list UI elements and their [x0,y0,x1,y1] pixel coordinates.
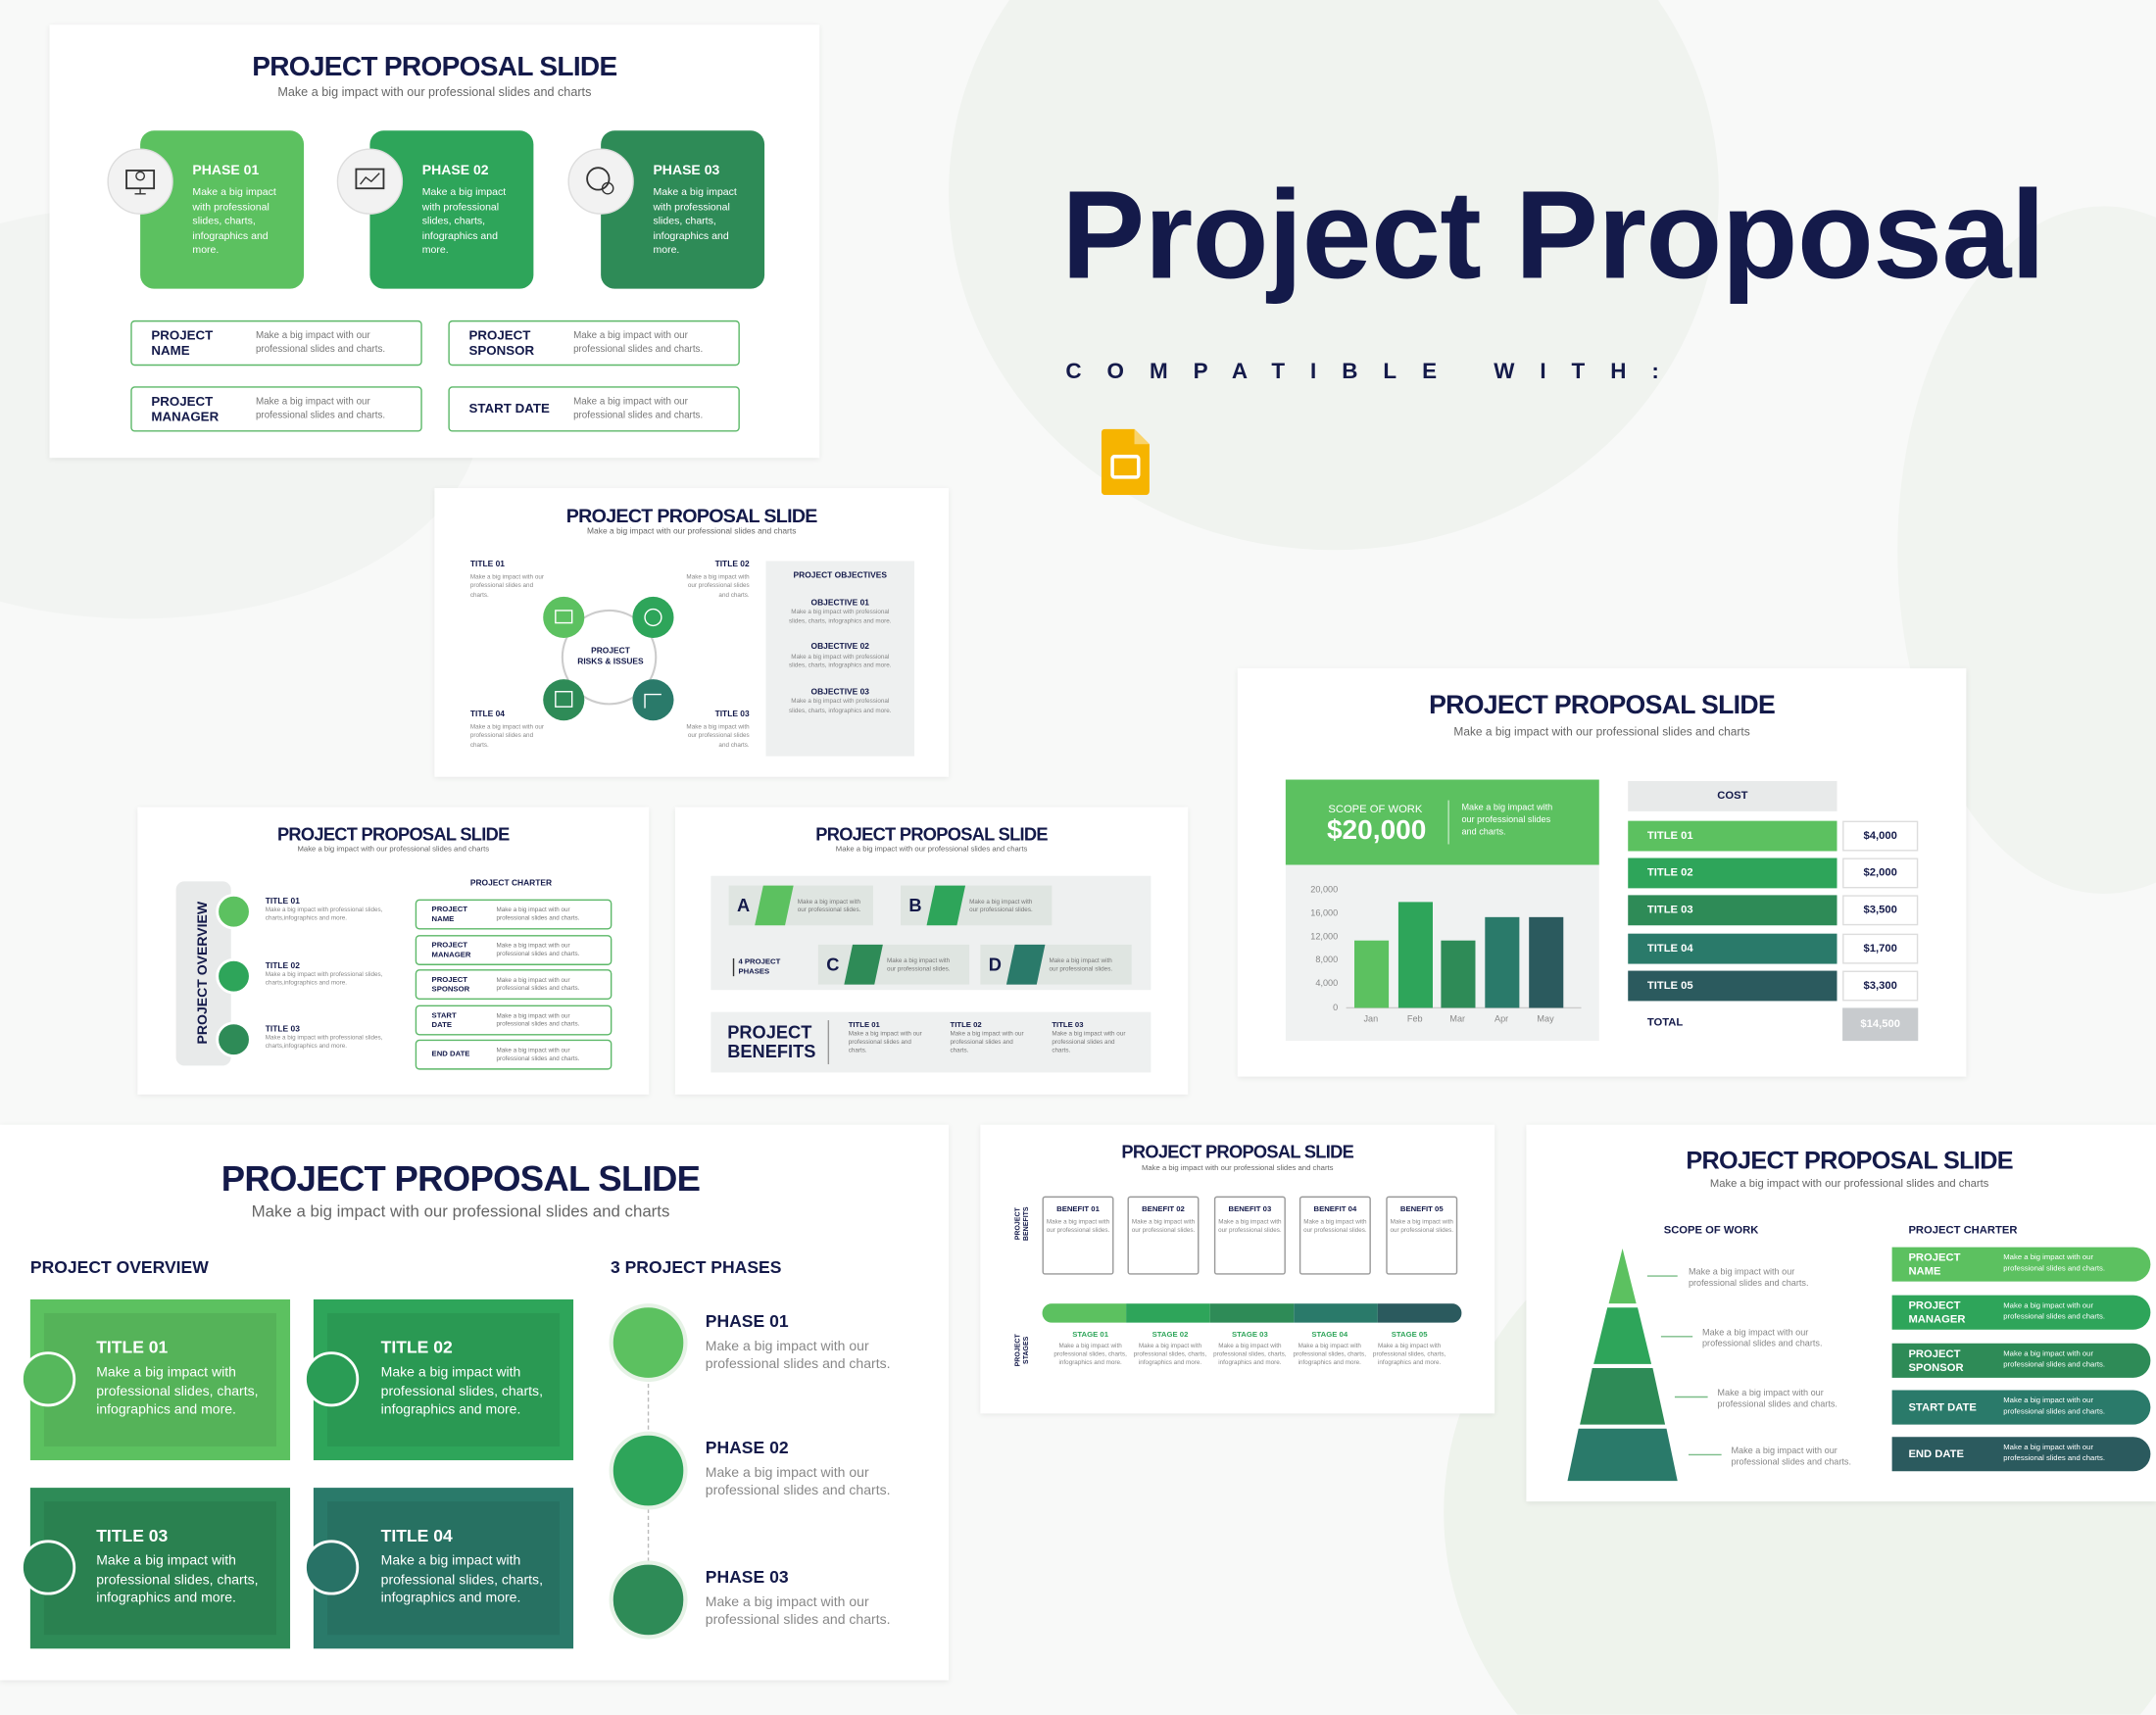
phases list: Make a big impact with our [706,1594,869,1609]
phases panel: C [826,955,839,975]
phase card 3: Make a big impact with professional slides, charts, infographics and more. [653,185,737,256]
slide 2: risks & objectives: TITLE 03 [715,710,750,719]
benefit boxes: BENEFIT 04 [1313,1205,1356,1214]
overview cards: TITLE 01 [96,1338,168,1357]
stages: STAGE 04 [1311,1331,1348,1340]
charter pills: MANAGER [1908,1312,1965,1325]
pyramid: professional slides and charts. [1731,1456,1851,1466]
objectives panel: slides, charts, infographics and more. [789,662,892,668]
overview cards [24,1299,574,1648]
info box: start date [448,386,740,432]
charter boxes: Make a big impact with our [497,942,570,949]
overview items [216,894,382,1056]
stages: Make a big impact with professional slides, charts, infographics and more. [1294,1342,1366,1365]
benefits panel: TITLE 02 [951,1021,982,1030]
bar chart: 16,000 [1310,907,1338,917]
stages: STAGE 02 [1152,1331,1188,1340]
vertical tab [176,881,231,1065]
slide 1: phases [50,24,819,458]
pyramid: Make a big impact with our [1717,1388,1824,1397]
slide 5: phases & benefits [675,808,1188,1095]
charter pills [1891,1224,2150,1472]
info box: sponsor: SPONSOR [468,344,534,359]
phases panel: 4 PROJECT [738,958,780,966]
objectives panel: OBJECTIVE 02 [811,644,869,652]
icon: google slides [1102,429,1150,496]
cost table: TITLE 01 [1647,829,1693,842]
overview items: TITLE 03 [266,1026,300,1034]
slide 6: overview & 3 phases (large) [0,1125,949,1681]
slide 3: scope & cost chart: Make a big impact with our professional slides and charts [1453,724,1750,738]
scope of work box: Make a big impact with [1461,803,1552,812]
overview items: TITLE 01 [266,898,300,906]
overview cards: TITLE 04 [381,1526,453,1545]
phases panel: our professional slides. [887,965,951,972]
bar chart [1286,865,1599,1041]
heading: PROJECT PROPOSAL SLIDE [815,823,1048,844]
charter pills: Make a big impact with our [2003,1397,2093,1405]
phases panel: B [908,895,922,915]
slide 7: benefits & stages: STAGES [1022,1337,1031,1364]
phases panel: A [737,895,750,915]
overview items: Make a big impact with professional slides, charts,infographics and more. [266,971,382,986]
heading: PROJECT PROPOSAL SLIDE [221,1157,700,1199]
scope of work box: and charts. [1461,828,1506,837]
titles: TITLE 01 [470,561,505,569]
phases list: PHASE 03 [706,1567,789,1587]
bar chart: 4,000 [1315,978,1338,988]
info box: sponsor: professional slides and charts. [573,345,703,355]
benefit boxes [1043,1196,1458,1275]
charter pills: PROJECT [1908,1348,1960,1360]
pyramid: professional slides and charts. [1702,1339,1823,1348]
info box: sponsor: PROJECT [468,328,530,344]
bar chart: Mar [1449,1013,1465,1023]
cost table: TITLE 03 [1647,904,1693,915]
charter boxes: SPONSOR [432,985,469,994]
objectives panel [766,561,914,757]
charter pills: END DATE [1908,1447,1964,1460]
phases list: professional slides and charts. [706,1613,891,1628]
bar chart: 0 [1333,1003,1338,1012]
pyramid: professional slides and charts. [1689,1278,1809,1288]
charter pills: Make a big impact with our [2003,1350,2093,1358]
scope of work box [1286,780,1599,865]
slide 1: phases: Make a big impact with our professional slides and charts [277,85,591,99]
charter boxes: START [432,1012,457,1020]
benefit boxes: Make a big impact with our professional slides. [1390,1218,1453,1234]
benefits panel: PROJECT [727,1021,811,1043]
heading: PROJECT PROPOSAL SLIDE [252,52,617,82]
info box: manager: professional slides and charts. [256,412,385,420]
pyramid: SCOPE OF WORK [1664,1224,1758,1236]
overview items: Make a big impact with professional slides, charts,infographics and more. [266,906,382,921]
slide 7: benefits & stages: Make a big impact with our professional slides and charts [1142,1164,1334,1173]
overview items: Make a big impact with professional slides, charts,infographics and more. [266,1034,382,1050]
benefits panel: Make a big impact with our professional slides and charts. [951,1030,1024,1054]
cost table: $1,700 [1864,942,1897,955]
benefit boxes: BENEFIT 01 [1056,1205,1100,1214]
phase card 1: Make a big impact with professional slides, charts, infographics and more. [192,185,276,256]
charter boxes: professional slides and charts. [497,1020,579,1027]
bar chart: 8,000 [1315,955,1338,964]
info box: project name: Make a big impact with our [256,331,370,341]
overview cards: Make a big impact with professional slides, charts, infographics and more. [381,1365,543,1418]
stages [1054,1331,1446,1366]
bar chart: 12,000 [1310,931,1338,941]
info box: project name: NAME [151,344,190,359]
scope of work box: $20,000 [1327,815,1426,846]
cost table: TOTAL [1647,1016,1683,1028]
bar chart: Jan [1364,1013,1378,1023]
phases label: 3 PROJECT PHASES [611,1258,781,1277]
info box: sponsor [448,320,740,366]
phase card 3 [568,130,764,289]
slide 3: scope & cost chart [1238,668,1966,1077]
vertical labels: PROJECT [1014,1207,1022,1240]
phases panel: Make a big impact with [798,898,860,905]
phases panel: PHASES [738,967,769,975]
phases panel: D [989,955,1002,975]
scope of work box: our professional slides [1461,815,1550,825]
titles [470,561,544,598]
slide 7: benefits & stages [980,1125,1494,1413]
info box: project name: PROJECT [151,328,213,344]
cost table: TITLE 05 [1647,979,1693,992]
objectives panel: Make a big impact with professional [791,608,889,614]
info box: project name [130,320,422,366]
stages: Make a big impact with professional slides, charts, infographics and more. [1054,1342,1127,1365]
vertical labels [1014,1206,1031,1241]
main title: Project Proposal [1061,167,2045,305]
cost table: $2,000 [1864,866,1897,879]
charter boxes: MANAGER [432,951,470,959]
vertical labels: BENEFITS [1022,1206,1031,1241]
benefits panel: TITLE 01 [849,1021,880,1030]
overview label: PROJECT OVERVIEW [30,1258,209,1277]
cost table: $3,500 [1864,904,1897,915]
charter boxes: PROJECT CHARTER [470,880,552,888]
benefit boxes: BENEFIT 02 [1142,1205,1185,1214]
phases list [610,1303,891,1639]
phases list: professional slides and charts. [706,1484,891,1498]
charter pills: Make a big impact with our [2003,1444,2093,1452]
pyramid: professional slides and charts. [1717,1398,1838,1408]
phase card 2: Make a big impact with professional slides, charts, infographics and more. [422,185,506,256]
overview cards: TITLE 02 [381,1338,453,1357]
overview items: TITLE 02 [266,962,300,971]
charter boxes: Make a big impact with our [497,1012,570,1019]
vertical tab: PROJECT OVERVIEW [196,902,211,1044]
phases list: PHASE 02 [706,1439,789,1457]
bar chart: May [1537,1013,1554,1023]
heading: PROJECT PROPOSAL SLIDE [277,823,510,844]
cost table: COST [1717,789,1747,802]
info box: project name: professional slides and charts. [256,345,385,355]
charter pills: START DATE [1908,1401,1977,1413]
charter pills: professional slides and charts. [2003,1313,2105,1321]
charter pills: SPONSOR [1908,1360,1964,1373]
heading: PROJECT PROPOSAL SLIDE [1686,1147,2013,1174]
objectives panel: OBJECTIVE 01 [811,599,869,607]
objectives panel: slides, charts, infographics and more. [789,616,892,623]
bar chart: 20,000 [1310,885,1338,895]
pyramid: Make a big impact with our [1702,1327,1808,1337]
bar chart: Feb [1407,1013,1423,1023]
phase card 2: PHASE 02 [422,164,489,178]
charter pills: professional slides and charts. [2003,1454,2105,1463]
overview cards: Make a big impact with professional slides, charts, infographics and more. [96,1365,259,1418]
charter boxes: Make a big impact with our [497,1047,570,1054]
slide 5: phases & benefits: Make a big impact with our professional slides and charts [836,846,1027,854]
slide 2: risks & objectives: TITLE 04 [470,710,505,719]
slide 2: risks & objectives: TITLE 02 [715,561,750,569]
heading: PROJECT PROPOSAL SLIDE [1121,1142,1353,1162]
phases list: professional slides and charts. [706,1357,891,1372]
charter boxes: professional slides and charts. [497,951,579,957]
phase card 2 [337,130,533,289]
phase card 3: PHASE 03 [653,164,719,178]
charter pills: professional slides and charts. [2003,1361,2105,1369]
objectives panel: PROJECT OBJECTIVES [794,572,887,580]
phases panel: our professional slides. [798,906,860,913]
phases list: Make a big impact with our [706,1465,869,1480]
charter pills: Make a big impact with our [2003,1254,2093,1262]
info box: manager: Make a big impact with our [256,397,370,407]
compatible with: COMPATIBLE WITH: [1065,361,1685,383]
slide 8: pyramid & charter: Make a big impact with our professional slides and charts [1710,1177,1988,1190]
slide 2: risks & objectives: Make a big impact with our professional slides and charts. [470,722,544,748]
objectives panel: slides, charts, infographics and more. [789,706,892,712]
stages: STAGE 05 [1392,1331,1428,1340]
cost table: TITLE 02 [1647,866,1693,879]
pyramid [1568,1224,1851,1482]
info box: start date: START DATE [468,402,550,416]
phases panel: our professional slides. [969,906,1033,913]
charter pills: NAME [1908,1264,1941,1277]
benefits panel: Make a big impact with our professional slides and charts. [1052,1030,1125,1054]
cost table: $3,300 [1864,979,1897,992]
benefit boxes: Make a big impact with our professional slides. [1132,1218,1195,1234]
charter boxes: professional slides and charts. [497,985,579,992]
overview cards: TITLE 03 [96,1526,168,1545]
benefit boxes: Make a big impact with our professional slides. [1218,1218,1282,1234]
benefit boxes: Make a big impact with our professional slides. [1303,1218,1367,1234]
charter boxes: Make a big impact with our [497,906,570,913]
slide 4: overview & charter [137,808,649,1095]
cost table: TITLE 04 [1647,942,1693,955]
charter boxes: END DATE [432,1051,469,1058]
slide 4: overview & charter: Make a big impact with our professional slides and charts [297,846,489,854]
charter pills: PROJECT [1908,1251,1960,1263]
charter boxes [416,880,612,1070]
stages: Make a big impact with professional slides, charts, infographics and more. [1213,1342,1287,1365]
benefit boxes: Make a big impact with our professional slides. [1047,1218,1109,1234]
info box: sponsor: Make a big impact with our [573,331,688,341]
benefits panel: TITLE 03 [1052,1021,1084,1030]
charter pills: PROJECT [1908,1299,1960,1312]
phases panel [710,876,1151,990]
slide 8: pyramid & charter [1526,1125,2156,1501]
phases list: Make a big impact with our [706,1339,869,1353]
phase card 1 [108,130,304,289]
pyramid: Make a big impact with our [1731,1446,1838,1455]
info box: manager [130,386,422,432]
objectives panel: OBJECTIVE 03 [811,688,869,697]
charter boxes: PROJECT [432,942,467,951]
info box: start date: professional slides and charts. [573,412,703,420]
stages: Make a big impact with professional slides, charts, infographics and more. [1134,1342,1206,1365]
stages: STAGE 01 [1072,1331,1108,1340]
progress bar [1043,1303,1462,1323]
scope of work box: SCOPE OF WORK [1328,803,1422,815]
phases list: PHASE 01 [706,1312,789,1331]
stages: STAGE 03 [1232,1331,1268,1340]
charter pills: PROJECT CHARTER [1908,1224,2017,1236]
slide 2: risks & objectives [434,488,949,777]
charter boxes: NAME [432,915,454,923]
info box: manager: PROJECT [151,395,213,410]
titles: Make a big impact with our professional slides and charts. [470,572,544,598]
benefits panel: BENEFITS [727,1041,815,1061]
benefits panel [710,1012,1151,1072]
slide 6: overview & 3 phases (large): Make a big impact with our professional slides and charts [252,1201,669,1221]
charter pills: professional slides and charts. [2003,1408,2105,1416]
phases panel: Make a big impact with [1050,957,1112,964]
benefit boxes: BENEFIT 03 [1229,1205,1271,1214]
charter boxes: professional slides and charts. [497,1054,579,1061]
bar chart: Apr [1494,1013,1508,1023]
cost table [1628,781,1919,1041]
heading: PROJECT PROPOSAL SLIDE [566,505,817,526]
charter pills: professional slides and charts. [2003,1265,2105,1273]
phase card 1: PHASE 01 [192,164,259,178]
charter boxes: Make a big impact with our [497,976,570,983]
info box: start date: Make a big impact with our [573,397,688,407]
slide 2: risks & objectives: Make a big impact with our professional slides and charts [587,528,796,536]
charter pills: Make a big impact with our [2003,1302,2093,1310]
objectives panel: Make a big impact with professional [791,653,889,660]
benefits panel: Make a big impact with our professional slides and charts. [849,1030,922,1054]
risk cycle diagram: PROJECT [591,648,630,656]
overview cards: Make a big impact with professional slides, charts, infographics and more. [381,1553,543,1606]
overview cards: Make a big impact with professional slides, charts, infographics and more. [96,1553,259,1606]
heading: PROJECT PROPOSAL SLIDE [1429,692,1775,720]
slide 7: benefits & stages: PROJECT [1014,1334,1022,1366]
objectives panel: Make a big impact with professional [791,697,889,704]
charter boxes: PROJECT [432,906,467,914]
benefit boxes: BENEFIT 05 [1400,1205,1444,1214]
charter boxes: DATE [432,1021,452,1029]
phases panel: Make a big impact with [887,957,950,964]
charter boxes: PROJECT [432,976,467,985]
info box: manager: MANAGER [151,410,219,425]
slide 2: risks & objectives: Make a big impact with our professional slides and charts. [686,572,750,598]
risk cycle diagram: RISKS & ISSUES [577,658,644,666]
charter boxes: professional slides and charts. [497,914,579,921]
slide 2: risks & objectives: Make a big impact with our professional slides and charts. [686,722,750,748]
cost table: $14,500 [1860,1017,1900,1030]
phases panel: our professional slides. [1050,965,1112,972]
stages: Make a big impact with professional slides, charts, infographics and more. [1373,1342,1446,1365]
risk cycle diagram [543,596,674,721]
pyramid: Make a big impact with our [1689,1267,1794,1277]
phases panel: Make a big impact with [969,898,1032,905]
cost table: $4,000 [1864,829,1897,842]
